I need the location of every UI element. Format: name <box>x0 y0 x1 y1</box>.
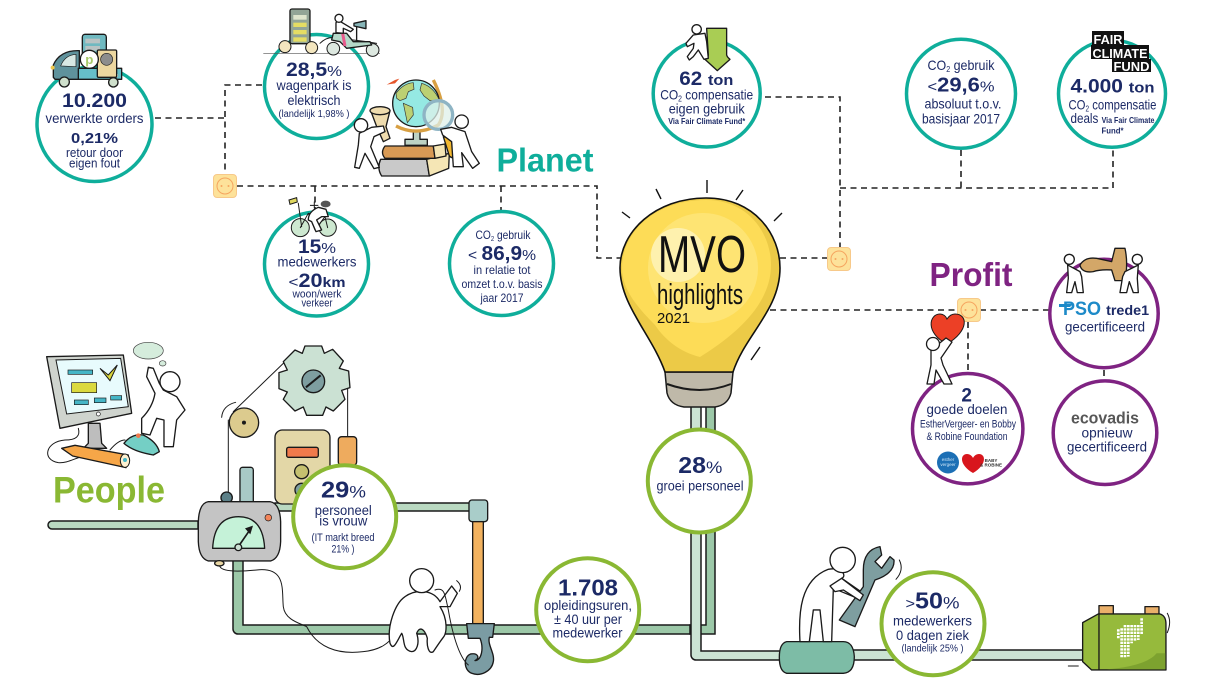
circle: 28,5% wagenpark: wagenpark is <box>276 77 352 93</box>
circle: 62 ton: compensatie <box>682 86 753 102</box>
circle: CO2 86,9%: in relatie tot <box>474 263 531 277</box>
red flag <box>387 79 399 85</box>
scroll <box>371 111 390 142</box>
circle: PSO trede 1: gecertificeerd <box>1065 319 1145 335</box>
circle: 2 goede doelen: 2 <box>961 386 972 407</box>
circle: 2 goede doelen <box>912 374 1023 484</box>
socket: planet <box>214 174 236 198</box>
circle: 15% medewerkers <box>264 212 368 316</box>
circle: 28% groei: groei personeel <box>656 478 744 494</box>
circle: 10.200 orders: retour door <box>66 145 124 160</box>
illustration: battery and scooter <box>263 9 380 56</box>
bulb rays <box>622 180 782 360</box>
logo: Bobby and Robine foundation: & ROBINE <box>980 462 1002 468</box>
circle: >50% medewerkers: 0 dagen ziek <box>896 627 970 643</box>
circle: 4.000 ton: deals Via Fair Climate <box>1070 110 1155 126</box>
circle: 1.708 opleidingsuren: opleidingsuren, <box>544 597 632 613</box>
circle: 1.708 opleidingsuren <box>536 558 639 661</box>
circle: 10.200 orders: 10.200 <box>62 91 127 112</box>
magnifier <box>424 101 453 129</box>
circle: 15% medewerkers: 15% <box>298 237 336 258</box>
circle: 29% personeel: (IT markt breed <box>312 532 374 544</box>
circle: 62 ton: CO <box>660 86 681 102</box>
bulb title MVO: MVO <box>658 226 746 284</box>
circle: 4.000 ton: compensatie <box>1089 96 1157 112</box>
bulb glass <box>620 198 780 372</box>
circle: 62 ton: Via Fair Climate Fund* <box>668 116 746 126</box>
pipe system <box>48 405 1093 660</box>
circle: 4.000 ton: 4.000 ton <box>1070 77 1154 98</box>
illustration: crane hook and sitting figure <box>389 500 494 674</box>
illustration: Fair Climate Fund logo <box>1091 31 1151 74</box>
circle: 62 ton <box>653 40 760 147</box>
illustration: figure with wrench <box>800 547 901 642</box>
circle: CO2 29,6%: 2 <box>946 65 951 74</box>
heading: People: People <box>53 469 165 510</box>
grey book <box>379 159 429 176</box>
circle: 10.200 orders: verwerkte orders <box>46 110 144 126</box>
illustration: pressure gauge <box>198 467 397 652</box>
circle: 2 goede doelen: goede doelen <box>926 401 1008 417</box>
circle: CO2 86,9%: CO <box>476 228 494 242</box>
circle: 29% personeel: 21% ) <box>332 544 354 556</box>
circle: 2 goede doelen: EstherVergeer- en Bobby <box>920 418 1016 430</box>
illustration: figures with stamp <box>1064 248 1142 293</box>
circle: 15% medewerkers: verkeer <box>302 298 333 310</box>
circle: >50% medewerkers: medewerkers <box>893 613 972 629</box>
illustration: figure with green arrow <box>686 25 730 71</box>
circle: 62 ton: eigen gebruik <box>669 100 746 116</box>
bulb subtitle highlights: highlights <box>657 279 743 311</box>
circle: CO2 86,9%: gebruik <box>494 228 531 242</box>
circle: CO2 86,9%: 2 <box>491 236 494 243</box>
illustration: figure holding heart <box>926 314 964 384</box>
circle: 29% personeel: 29% <box>321 476 366 502</box>
circle: CO2 29,6% <box>906 39 1016 148</box>
left figure <box>355 126 385 169</box>
circle: PSO trede 1: PSO <box>1063 299 1101 320</box>
circle: 28,5% wagenpark: elektrisch <box>288 92 340 108</box>
circle: 15% medewerkers: medewerkers <box>278 254 356 270</box>
circle: 10.200 orders: 0,21% <box>71 130 118 147</box>
circle: 4.000 ton: CO <box>1068 96 1090 112</box>
circle: 62 ton: 2 <box>678 94 682 103</box>
globe stand <box>405 132 427 145</box>
circle: CO2 86,9%: < 86,9% <box>468 243 536 265</box>
circle: CO2 86,9%: jaar 2017 <box>480 291 524 305</box>
circle: >50% medewerkers: (landelijk 25% ) <box>902 644 964 655</box>
light bulb <box>620 180 782 407</box>
heading: Planet: Planet <box>496 142 594 179</box>
circle: 4.000 ton <box>1058 40 1166 147</box>
orange book <box>382 146 435 158</box>
circle: 29% personeel: personeel <box>315 502 372 518</box>
circle: 62 ton: 62 ton <box>679 69 733 90</box>
circle: PSO trede 1 <box>1050 259 1158 368</box>
circle: 28,5% wagenpark <box>264 34 368 138</box>
circle: 1.708 opleidingsuren: 1.708 <box>558 574 618 600</box>
circle: 15% medewerkers: <20km <box>288 271 346 292</box>
bulb inner glow <box>622 200 771 357</box>
circle: ecovadis <box>1053 381 1157 485</box>
circle: 2 goede doelen: & Robine Foundation <box>926 431 1008 443</box>
circle: 28% groei <box>648 430 751 532</box>
bulb screw base <box>665 372 733 407</box>
circle: CO2 29,6%: gebruik <box>950 57 995 73</box>
bulb year: 2021 <box>657 310 690 327</box>
circle: 28,5% wagenpark: 28,5 % <box>286 60 342 81</box>
illustration: delivery truck: p <box>85 52 93 67</box>
logo: Esther Vergeer foundation <box>937 452 959 474</box>
logo: Esther Vergeer foundation: esther <box>942 457 955 462</box>
illustration: globe with books and figures <box>354 79 479 176</box>
circle: 29% personeel: is vrouw <box>319 513 368 529</box>
circle: CO2 29,6%: CO <box>928 57 948 73</box>
right figure <box>441 127 479 168</box>
illustration: Fair Climate Fund logo: FUND <box>1114 59 1150 74</box>
circle: ecovadis: gecertificeerd <box>1067 439 1147 455</box>
circle: CO2 29,6%: <29,6 % <box>928 74 994 96</box>
illustration: Fair Climate Fund logo: FAIR <box>1094 32 1123 47</box>
circle: PSO trede 1: trede1 <box>1106 302 1149 318</box>
circle: >50% medewerkers <box>882 572 984 675</box>
circle: CO2 29,6%: basisjaar 2017 <box>922 110 1000 126</box>
illustration: delivery truck <box>51 34 122 87</box>
logo: Bobby and Robine foundation: BABY <box>985 458 997 463</box>
circle: CO2 29,6%: absoluut t.o.v. <box>924 95 1002 111</box>
circle: 28,5% wagenpark: (landelijk 1,98% ) <box>278 109 350 120</box>
circle: 4.000 ton: Fund* <box>1102 126 1124 136</box>
heading: Profit: Profit <box>930 256 1012 293</box>
circle: 15% medewerkers: woon/werk <box>292 289 342 301</box>
illustration: actuator cylinder <box>779 642 854 673</box>
illustration: battery with logo <box>1068 606 1170 670</box>
circle: CO2 86,9%: omzet t.o.v. basis <box>462 277 542 291</box>
circle: 10.200 orders <box>37 66 152 182</box>
circle: >50% medewerkers: >50% <box>906 587 960 613</box>
logo: Esther Vergeer foundation: vergeer <box>940 462 956 467</box>
circle: ecovadis: ecovadis <box>1071 408 1139 427</box>
circle: 28% groei: 28% <box>678 452 722 478</box>
circle: CO2 86,9% <box>450 212 554 316</box>
circle: 4.000 ton: 2 <box>1085 104 1090 113</box>
socket: centre <box>828 248 850 270</box>
globe <box>393 80 439 127</box>
illustration: cyclist <box>289 198 336 237</box>
illustration: computer workspace <box>47 342 185 468</box>
circle: ecovadis: opnieuw <box>1082 425 1133 441</box>
yellow bag <box>443 137 458 158</box>
illustration: Fair Climate Fund logo: CLIMATE <box>1092 46 1148 61</box>
logo: Bobby and Robine foundation <box>962 454 1002 473</box>
circle: 1.708 opleidingsuren: ± 40 uur per <box>554 611 622 627</box>
socket: profit <box>958 298 980 322</box>
connector lines <box>155 85 1113 377</box>
circle: 1.708 opleidingsuren: medewerker <box>552 624 623 640</box>
illustration: gear and pulley machine <box>222 346 357 504</box>
circle: 10.200 orders: eigen fout <box>69 156 120 171</box>
circle: 29% personeel <box>293 465 396 568</box>
